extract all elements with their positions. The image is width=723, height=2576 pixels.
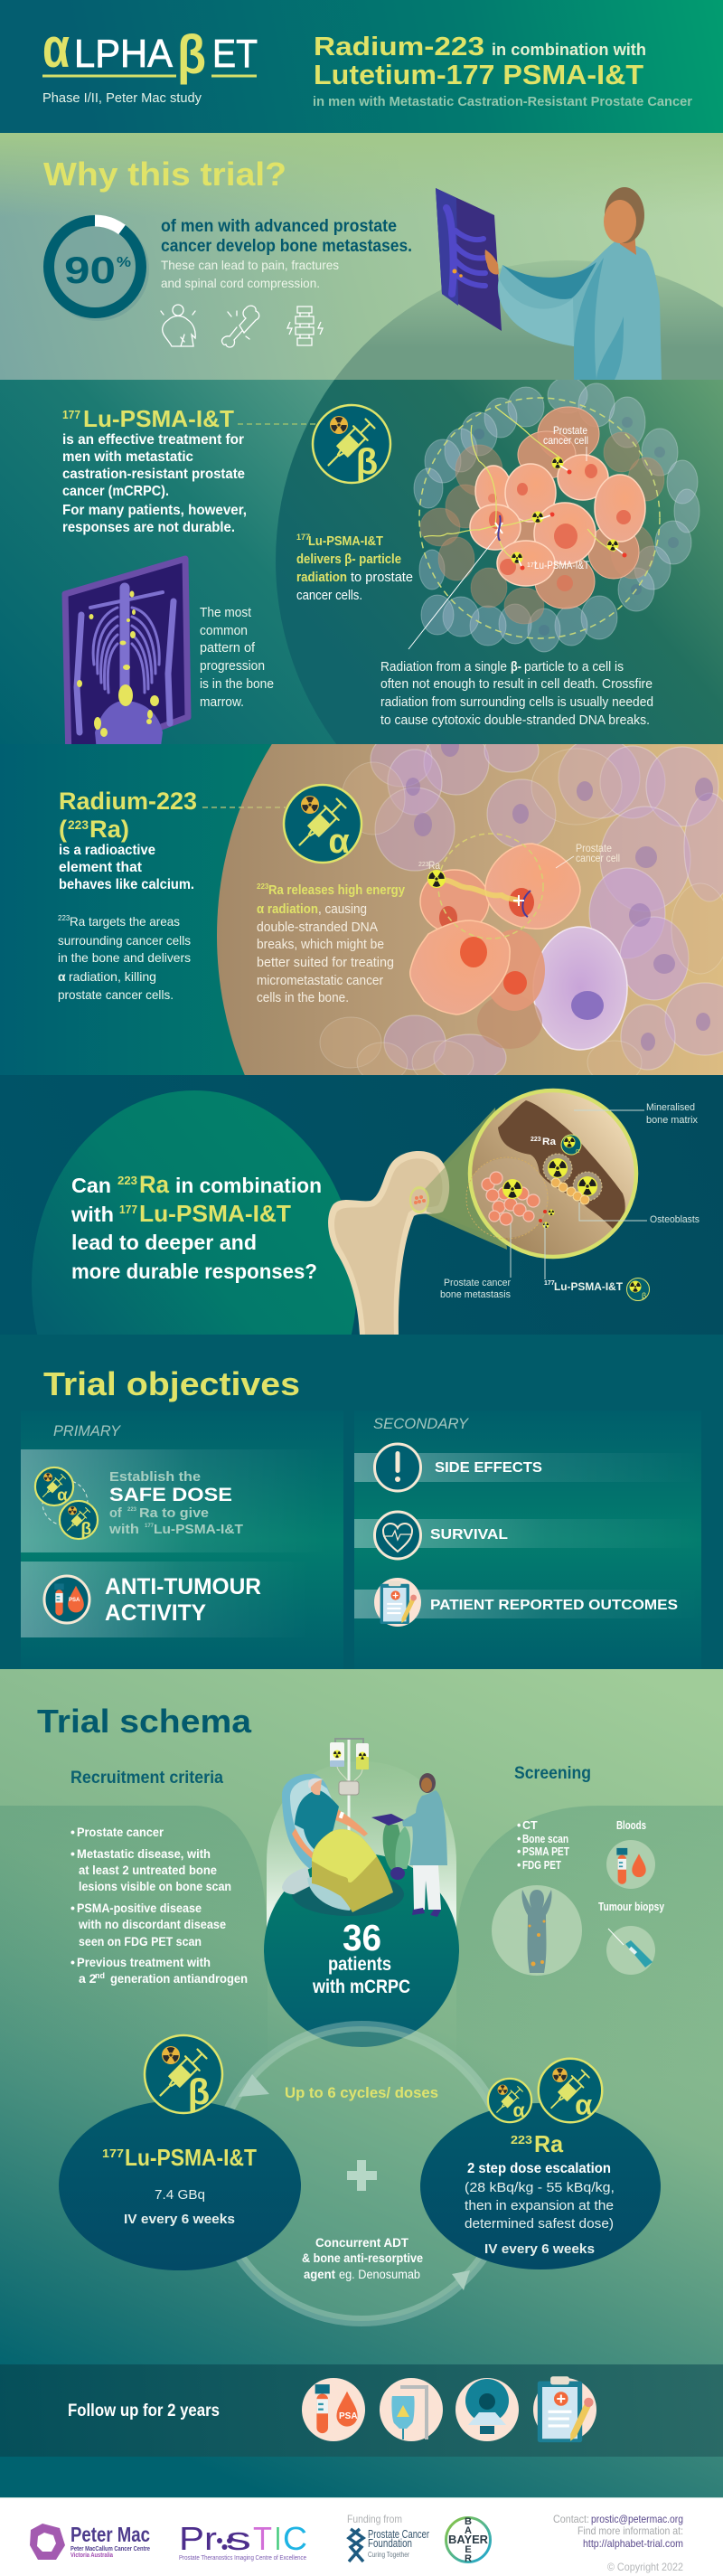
objective: safe dose: with xyxy=(108,1523,139,1537)
logo: Prostate Cancer Foundation xyxy=(349,2527,429,2562)
text: delivers beta particle radiation: to prostate xyxy=(351,570,413,585)
icon: alpha syringe small xyxy=(488,2079,531,2122)
icon: spine xyxy=(287,307,323,345)
labels on bone diagram: Lu-PSMA-I&T xyxy=(554,1282,623,1293)
objective: safe dose: Ra to give xyxy=(139,1506,209,1521)
logo: ProsTIC: Pr xyxy=(179,2520,217,2557)
heading: radium-223 xyxy=(59,788,197,843)
text: recruitment criteria list: PSMA-positive disease xyxy=(77,1901,202,1915)
panel: trial schema xyxy=(0,1669,723,2497)
objective: anti-tumour activity xyxy=(21,1562,310,1637)
text: scans list xyxy=(517,1819,569,1872)
text: recruitment criteria list: lesions visible on bone scan xyxy=(79,1879,231,1893)
donut chart: 90%: 90 xyxy=(64,249,116,291)
text: crossfire radiation: often not enough to result in cell death. Crossfire xyxy=(380,676,653,692)
question text: lead to deeper and xyxy=(71,1231,257,1254)
text: high energy alpha radiation: better suited for treating xyxy=(257,955,394,970)
heading: radium-223: Radium-223 xyxy=(59,788,197,815)
text: recruitment criteria list: Metastatic disease, with xyxy=(77,1846,211,1861)
heading: 177Lu-PSMA-I&T: Lu-PSMA-I&T xyxy=(83,405,234,432)
text: scans list: PSMA PET xyxy=(522,1845,569,1858)
icon: alpha syringe small: α xyxy=(513,2099,525,2121)
panel: trial objectives xyxy=(0,1335,723,1669)
text: radium targets xyxy=(58,914,191,1002)
donut chart: 90%: % xyxy=(117,255,131,270)
text: contact details: Find more information at: xyxy=(577,2524,683,2537)
illustration: magnified bone metastasis: Ra xyxy=(542,1137,557,1147)
illustration: bone cells background xyxy=(371,729,723,1081)
tumour biopsy xyxy=(598,1901,664,1975)
text: crossfire radiation: radiation from surrounding cells is usually needed xyxy=(380,694,653,710)
text: delivers beta particle radiation: cancer cells. xyxy=(296,588,362,603)
cancer cell cluster xyxy=(482,1172,540,1225)
logo: ProsTIC: T xyxy=(253,2520,272,2557)
text: high energy alpha radiation: breaks, which might be xyxy=(257,937,384,952)
text: recruitment criteria list: with no discordant disease xyxy=(78,1917,226,1931)
icon: MRI scanner xyxy=(455,2378,519,2441)
labels on cluster: cancer cell xyxy=(543,434,588,447)
text: high energy alpha radiation: cells in the bone. xyxy=(257,990,349,1005)
heading: 177Lu-PSMA-I&T: 177 xyxy=(62,408,80,421)
circle: 36 patients: patients xyxy=(328,1954,391,1975)
objective: safe dose: 177 xyxy=(145,1524,155,1529)
panel: radium dose: (28 kBq/kg - 55 kBq/kg, xyxy=(465,2180,615,2195)
panel: radium dose: then in expansion at the xyxy=(465,2198,614,2213)
heading: 177Lu-PSMA-I&T xyxy=(63,410,234,427)
logo: Bayer: R xyxy=(465,2553,472,2564)
question text: Can xyxy=(71,1174,111,1197)
illustration: magnified bone metastasis: 223 xyxy=(531,1137,541,1143)
label lines xyxy=(511,1110,647,1279)
labels on cluster: Prostate xyxy=(553,424,587,437)
question text: more durable responses? xyxy=(71,1260,317,1283)
text: scans list: • xyxy=(517,1845,521,1858)
illustration: magnified bone metastasis: α xyxy=(576,1148,579,1155)
text: crossfire radiation xyxy=(380,659,653,728)
labels on cluster: Lu-PSMA-I&T xyxy=(534,559,590,571)
panel: secondary objectives xyxy=(354,1411,701,1669)
labels on cells xyxy=(418,845,620,869)
objective: safe dose: 223 xyxy=(127,1507,137,1513)
heading: why this trial: Why this trial? xyxy=(43,156,286,193)
text: bone metastases statistic: These can lead to pain, fractures xyxy=(161,258,339,272)
labels on bone diagram: 177 xyxy=(544,1280,555,1287)
text: Lu-PSMA description: castration-resistant prostate xyxy=(62,467,245,482)
plus sign xyxy=(347,2160,377,2191)
icon: alpha syringe small: α xyxy=(57,1486,68,1505)
icon: radioactive infusion xyxy=(380,2378,443,2441)
illustration: beta crossfire cell cluster xyxy=(408,377,700,652)
icon: beta syringe xyxy=(145,2035,222,2113)
logo: ProsTIC: I xyxy=(275,2520,281,2557)
objective: safe dose: Establish the xyxy=(109,1470,201,1485)
text: recruitment criteria list xyxy=(70,1825,248,1986)
logo: Peter Mac: Victoria Australia xyxy=(70,2552,113,2559)
text: high energy alpha radiation: double-stranded DNA xyxy=(257,920,378,935)
text: scans list: FDG PET xyxy=(522,1859,561,1872)
heading: trial schema: Trial schema xyxy=(37,1703,252,1740)
text: crossfire radiation: Radiation from a single xyxy=(380,659,507,675)
labels on cluster xyxy=(527,424,590,571)
question text: in combination xyxy=(175,1174,322,1197)
illustration: doctor with x-ray xyxy=(436,187,662,380)
panel: radium dose: 223 xyxy=(511,2133,532,2147)
panel: radium dose: IV every 6 weeks xyxy=(484,2241,595,2257)
text: radium targets: radiation, killing xyxy=(69,969,156,984)
panel: radium dose: Ra xyxy=(534,2130,564,2157)
objective: survival xyxy=(374,1512,508,1559)
question text: Ra xyxy=(139,1171,170,1198)
text: scans list: CT xyxy=(522,1819,538,1832)
circle: 36 patients: with mCRPC xyxy=(312,1977,410,1997)
icon: back pain xyxy=(161,305,195,346)
tumour biopsy: Tumour biopsy xyxy=(598,1901,664,1913)
labels on bone diagram: bone matrix xyxy=(646,1115,698,1126)
study subtitle: Phase I/II, Peter Mac study xyxy=(42,90,202,106)
objective: safe dose: of xyxy=(109,1506,122,1521)
heading: recruitment criteria: Recruitment criteria xyxy=(70,1769,223,1788)
text: pattern of progression: progression xyxy=(200,659,265,674)
text: scans list: Bone scan xyxy=(522,1833,568,1845)
trial title xyxy=(313,33,692,109)
objective: side effects xyxy=(374,1444,542,1491)
text: delivers beta particle radiation xyxy=(296,533,413,603)
panel: lutetium dose xyxy=(59,2035,301,2270)
text: recruitment criteria list: • xyxy=(70,1825,75,1839)
logo: Bayer: A xyxy=(465,2525,472,2536)
illustration: whole-body PET scan xyxy=(492,1885,582,1976)
text: concurrent therapy: Concurrent ADT xyxy=(315,2236,409,2250)
text: delivers beta particle radiation: radiation xyxy=(296,570,347,585)
cycle arrow ring xyxy=(214,2026,509,2321)
text: concurrent therapy: eg. Denosumab xyxy=(339,2268,420,2281)
labels on bone diagram: Mineralised xyxy=(646,1102,695,1113)
illustration: prostate cancer cells with alpha radiation xyxy=(410,834,627,1050)
label: cycles: Up to 6 cycles/ doses xyxy=(285,2084,438,2101)
objective: patient reported outcomes: PATIENT REPORTED OUTCOMES xyxy=(430,1598,678,1613)
text: contact details: Contact: xyxy=(553,2513,589,2525)
trial title: in combination with xyxy=(492,41,646,59)
trial title: in men with Metastatic Castration-Resistant Prostate Cancer xyxy=(313,95,692,109)
logo: Peter Mac: Peter Mac xyxy=(70,2523,150,2546)
icon: PSA blood test: PSA xyxy=(339,2411,358,2421)
panel: lutetium dose: 177 xyxy=(102,2147,124,2160)
text: recruitment criteria list: Previous treatment with xyxy=(77,1955,211,1969)
question text: with xyxy=(70,1203,114,1226)
text: contact details: prostic@petermac.org xyxy=(591,2513,683,2525)
logo: Bayer: E xyxy=(465,2544,472,2555)
logo: ProsTIC: Prostate Theranostics Imaging Centre of Excellence xyxy=(179,2555,306,2562)
objective: anti-tumour activity: PSA xyxy=(69,1598,80,1603)
text: bone metastases statistic xyxy=(161,216,412,290)
bloods xyxy=(606,1819,655,1889)
heading: radium-223: Ra) xyxy=(89,816,129,843)
text: bone metastases statistic: cancer develop bone metastases. xyxy=(161,236,412,256)
icon: alpha syringe: α xyxy=(328,823,350,861)
question text: Lu-PSMA-I&T xyxy=(139,1200,291,1227)
logo: ProsTIC: C xyxy=(283,2520,307,2557)
icon: beta syringe xyxy=(313,405,390,483)
text: radium description xyxy=(60,845,193,889)
logo: AlphaBet: ET xyxy=(212,32,258,76)
text: Lu-PSMA description: For many patients, however, xyxy=(62,503,247,518)
text: recruitment criteria list: at least 2 untreated bone xyxy=(79,1863,217,1877)
text: pattern of progression: is in the bone xyxy=(200,677,274,692)
illustration: magnified bone metastasis xyxy=(465,1090,636,1257)
objective: patient reported outcomes xyxy=(374,1578,678,1627)
donut chart: 90% xyxy=(46,218,149,321)
header band xyxy=(0,0,723,133)
text: contact details: http://alphabet-trial.com xyxy=(583,2537,683,2550)
bloods: Bloods xyxy=(616,1819,646,1832)
text: recruitment criteria list: • xyxy=(70,1901,75,1915)
labels on cluster: 177 xyxy=(527,562,538,569)
labels on bone diagram: Osteoblasts xyxy=(650,1214,700,1225)
text: pattern of progression: common xyxy=(200,624,248,638)
text: radium targets: 223 xyxy=(58,914,70,922)
illustration: x-ray skeleton xyxy=(65,559,188,761)
text: contact details: © Copyright 2022 xyxy=(607,2561,683,2573)
text: recruitment criteria list: generation antiandrogen xyxy=(110,1971,248,1986)
labels on cells: 223 xyxy=(418,862,429,868)
icon: fractured bone xyxy=(222,306,259,347)
text: contact details xyxy=(553,2513,683,2573)
icon: small beta: β xyxy=(642,1291,646,1300)
panel: primary objectives xyxy=(21,1411,343,1669)
objective: survival: SURVIVAL xyxy=(430,1527,508,1543)
text: delivers beta particle radiation: Lu-PSMA-I&T xyxy=(308,533,383,549)
icon: small beta xyxy=(627,1279,649,1300)
text: scans list: • xyxy=(517,1859,521,1872)
panel: radium dose xyxy=(420,2059,661,2269)
objective: safe dose: Lu-PSMA-I&T xyxy=(154,1523,243,1537)
panel: radium dose: 2 step dose escalation xyxy=(467,2161,611,2176)
logo: AlphaBet: β xyxy=(177,24,206,85)
text: high energy alpha radiation: micrometastatic cancer xyxy=(257,973,383,988)
logo: Prostate Cancer Foundation: Prostate Cancer xyxy=(368,2527,429,2541)
heading: trial objectives: Trial objectives xyxy=(43,1365,300,1402)
logo: AlphaBet: LPHA xyxy=(74,32,174,76)
text: recruitment criteria list: a 2 xyxy=(79,1971,97,1986)
text: radium targets: Ra targets the areas xyxy=(70,914,180,929)
icon: alpha syringe large xyxy=(539,2059,602,2122)
logo: Peter Mac xyxy=(30,2523,150,2560)
objective: safe dose xyxy=(21,1449,328,1552)
circle: 36 patients xyxy=(264,1854,459,2047)
logo: Peter Mac: Peter MacCallum Cancer Centre xyxy=(70,2546,150,2552)
heading: radium-223: ( xyxy=(59,816,67,843)
panel: why this trial xyxy=(0,133,723,380)
heading: radium-223: 223 xyxy=(68,817,89,832)
text: funding from: Funding from xyxy=(347,2513,402,2525)
text: concurrent therapy: & bone anti-resorptive xyxy=(302,2251,423,2265)
text: bone metastases statistic: and spinal cord compression. xyxy=(161,276,320,290)
heading: screening: Screening xyxy=(514,1764,591,1783)
icon: clipboard xyxy=(533,2376,596,2442)
text: radium targets: prostate cancer cells. xyxy=(58,987,174,1002)
labels on bone diagram: bone metastasis xyxy=(440,1289,511,1300)
illustration: patient receiving infusion with nurse xyxy=(282,1738,447,1917)
text: radium targets: in the bone and delivers xyxy=(58,950,191,965)
panel: radium dose: determined safest dose) xyxy=(465,2216,614,2232)
labels on bone diagram: Prostate cancer xyxy=(444,1278,511,1288)
text: high energy alpha radiation: Ra releases high energy xyxy=(268,882,406,898)
panel: lutetium treatment xyxy=(0,380,723,744)
text: recruitment criteria list: Prostate cancer xyxy=(77,1825,164,1839)
objective: anti-tumour activity: ACTIVITY xyxy=(105,1600,206,1626)
text: radium description: is a radioactive xyxy=(59,843,155,858)
text: crossfire radiation: to cause cytotoxic double-stranded DNA breaks. xyxy=(380,712,650,728)
icon: beta syringe: β xyxy=(356,442,378,482)
text: Lu-PSMA description: is an effective treatment for xyxy=(62,432,244,448)
objective: anti-tumour activity: ANTI-TUMOUR xyxy=(105,1574,261,1599)
labels on cells: cancer cell xyxy=(576,852,620,864)
illustration: femur xyxy=(328,1108,507,1335)
label: secondary: SECONDARY xyxy=(373,1415,470,1432)
text: bone metastases statistic: of men with advanced prostate xyxy=(161,216,397,236)
band: follow up xyxy=(0,2364,723,2457)
logo: AlphaBet xyxy=(42,17,258,85)
panel: radium-223 xyxy=(0,744,723,1075)
text: pattern of progression: marrow. xyxy=(200,695,244,710)
panel: lutetium dose: IV every 6 weeks xyxy=(124,2212,235,2227)
text: high energy alpha radiation: α radiation xyxy=(257,901,318,917)
text: high energy alpha radiation: 223 xyxy=(257,882,269,891)
text: recruitment criteria list: • xyxy=(70,1846,75,1861)
logo: Bayer: BAYER xyxy=(448,2534,488,2546)
callout line xyxy=(408,536,497,649)
labels on cells: Prostate xyxy=(576,842,612,854)
illustration: patient background arch xyxy=(267,1761,456,1944)
objective: side effects: SIDE EFFECTS xyxy=(435,1460,542,1476)
text: recruitment criteria list: nd xyxy=(95,1971,105,1980)
text: Lu-PSMA description xyxy=(62,432,247,535)
icon: beta syringe: β xyxy=(188,2072,210,2112)
logo: Bayer xyxy=(446,2516,490,2564)
question text: 177 xyxy=(119,1203,137,1216)
icon: PSA blood test xyxy=(302,2378,365,2441)
trial title: Lutetium-177 PSMA-I&T xyxy=(314,59,643,90)
text: crossfire radiation: β- xyxy=(511,659,521,675)
text: high energy alpha radiation xyxy=(257,882,406,1005)
logo: Prostate Cancer Foundation: Curing Together xyxy=(368,2551,409,2559)
trial title: Radium-223 xyxy=(314,33,484,61)
text: radium description: element that xyxy=(59,860,142,875)
icon: beta syringe small xyxy=(60,1501,98,1539)
panel: research question xyxy=(0,1075,723,1335)
text: Lu-PSMA description: responses are not durable. xyxy=(62,520,235,535)
text: Lu-PSMA description: men with metastatic xyxy=(62,449,193,465)
circle: 36 patients: 36 xyxy=(343,1917,381,1958)
text: pattern of progression: The most xyxy=(200,606,251,620)
text: recruitment criteria list: seen on FDG PET scan xyxy=(79,1934,202,1949)
footer xyxy=(0,2497,723,2576)
text: Lu-PSMA description: cancer (mCRPC). xyxy=(62,484,169,499)
text: delivers beta particle radiation: delivers β- particle xyxy=(296,552,401,567)
logo: Bayer: B xyxy=(465,2516,472,2527)
icon: alpha syringe large: α xyxy=(575,2089,592,2120)
text: crossfire radiation: particle to a cell is xyxy=(524,659,624,675)
text: radium targets: surrounding cancer cells xyxy=(58,933,191,948)
text: pattern of progression xyxy=(200,606,274,710)
panel: lutetium dose: 7.4 GBq xyxy=(155,2187,205,2203)
text: high energy alpha radiation: , causing xyxy=(318,901,367,917)
text: pattern of progression: pattern of xyxy=(200,641,256,656)
text: recruitment criteria list: • xyxy=(70,1955,75,1969)
logo: AlphaBet: α xyxy=(42,17,70,80)
logo: ProsTIC xyxy=(179,2520,307,2562)
panel: lutetium dose: Lu-PSMA-I&T xyxy=(125,2144,257,2171)
objective: safe dose: SAFE DOSE xyxy=(109,1485,232,1505)
text: concurrent therapy: agent xyxy=(304,2268,335,2281)
text: scans list: • xyxy=(517,1833,521,1845)
question text xyxy=(70,1171,322,1283)
text: delivers beta particle radiation: 177 xyxy=(296,533,310,542)
osteoblasts and radium xyxy=(543,1154,602,1201)
logo: ProsTIC: s xyxy=(226,2520,251,2557)
icon: alpha syringe xyxy=(284,785,362,863)
labels on bone diagram xyxy=(440,1102,700,1300)
text: radium targets: α xyxy=(58,969,66,984)
text: scans list: • xyxy=(517,1819,521,1832)
question text: 223 xyxy=(117,1174,137,1187)
icon: alpha syringe small xyxy=(35,1467,73,1505)
text: radium description: behaves like calcium. xyxy=(59,877,194,892)
logo: Prostate Cancer Foundation: Foundation xyxy=(368,2536,412,2550)
icon: beta syringe small: β xyxy=(80,1519,91,1539)
band: follow up: Follow up for 2 years xyxy=(68,2401,220,2420)
labels on cells: Ra xyxy=(428,859,440,872)
label: primary: PRIMARY xyxy=(53,1422,122,1439)
text: concurrent therapy xyxy=(302,2236,423,2281)
